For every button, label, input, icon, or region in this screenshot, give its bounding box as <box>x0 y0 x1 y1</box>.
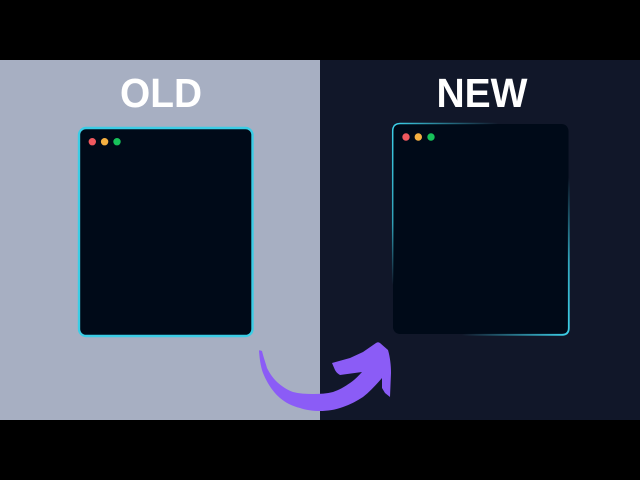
glowing edge: bottom right corner <box>562 328 569 335</box>
old window <box>79 128 252 336</box>
window control dots <box>402 133 435 141</box>
window control dots <box>89 138 121 145</box>
heading: OLD: OLD <box>120 70 202 116</box>
glowing edge: left <box>392 131 394 285</box>
glowing edge: right <box>568 178 570 328</box>
new window <box>393 124 569 335</box>
heading: NEW: NEW <box>436 70 528 116</box>
glowing edge: top left corner <box>393 124 400 131</box>
arrow: old to new <box>259 342 391 411</box>
panel: old <box>0 60 320 420</box>
glowing edge: top <box>400 122 498 124</box>
glowing edge: bottom <box>462 334 562 336</box>
panel: new <box>320 60 640 420</box>
